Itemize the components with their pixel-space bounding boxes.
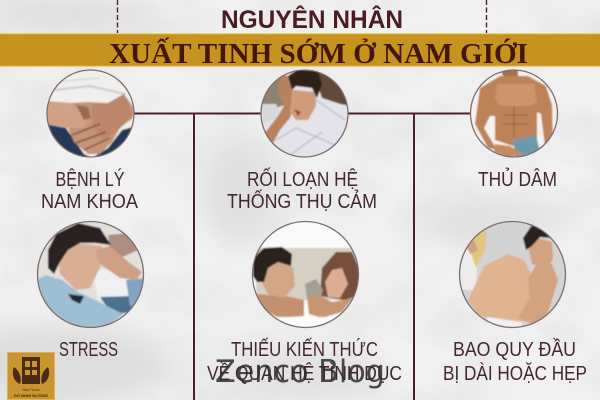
banner title: XUẤT TINH SỚM Ở NAM GIỚI [109, 38, 528, 70]
connector lines [134, 114, 470, 400]
label: stress: STRESS [59, 339, 118, 361]
label: thủ dâm: THỦ DÂM [478, 167, 557, 191]
label: bệnh lý nam khoa: BỆNH LÝ [56, 168, 124, 191]
label: thiếu kiến thức về quan hệ tình dục: VỀ QUAN HỆ TÌNH DỤC [207, 362, 402, 385]
title: Nguyên nhân: NGUYÊN NHÂN [221, 4, 403, 34]
logo: Đỗ Minh Đường [7, 352, 55, 400]
banner [0, 33, 600, 70]
dashed connector left [116, 0, 118, 33]
photo: hands (bệnh lý nam khoa) [46, 69, 136, 160]
logo: Đỗ Minh Đường: ĐỖ MINH ĐƯỜNG [14, 393, 48, 398]
photo: tired man on bed (rối loạn hệ thống thụ cảm) [260, 69, 350, 159]
photo: bare torso (thủ dâm) [469, 69, 559, 159]
dashed connector right [486, 0, 488, 33]
label: bao quy đầu bị dài hoặc hẹp: BAO QUY ĐẦU [453, 338, 576, 361]
photo: couple in bed (thiếu kiến thức) [250, 220, 362, 332]
label: rối loạn hệ thống thụ cảm: THỐNG THỤ CẢM [227, 189, 377, 213]
label: bao quy đầu bị dài hoặc hẹp [443, 338, 587, 385]
label: bệnh lý nam khoa [41, 168, 139, 213]
label: thiếu kiến thức về quan hệ tình dục [207, 338, 402, 385]
label: bệnh lý nam khoa: NAM KHOA [41, 191, 139, 213]
photo: sad shirtless man (bao quy đầu) [458, 220, 568, 332]
label: thiếu kiến thức về quan hệ tình dục: THIẾU KIẾN THỨC [231, 338, 378, 361]
photo: stressed man (stress) [36, 220, 146, 332]
label: rối loạn hệ thống thụ cảm [227, 167, 377, 213]
label: rối loạn hệ thống thụ cảm: RỐI LOẠN HỆ [247, 167, 358, 191]
watermark: Zenco Blog [215, 354, 385, 390]
logo: Đỗ Minh Đường: Nhà Thuốc [22, 388, 40, 392]
